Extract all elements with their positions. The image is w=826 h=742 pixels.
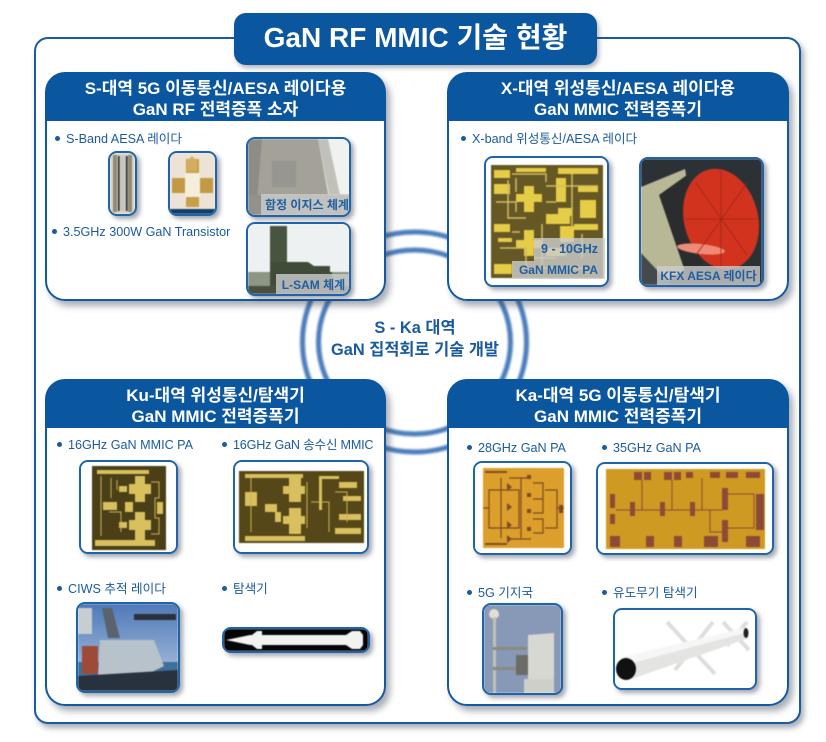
image: X-band MMIC chip: 9 - 10GHz <box>541 242 598 256</box>
heading: Ku-band: Ku-대역 위성통신/탐색기 <box>126 386 305 405</box>
heading: Ka-band: GaN MMIC 전력증폭기 <box>534 407 702 426</box>
bullet: 16GHz PA: 16GHz GaN MMIC PA <box>68 438 193 452</box>
heading: S-band <box>45 72 386 121</box>
panel: S-band <box>45 72 386 301</box>
image: 5G base station <box>482 603 563 695</box>
bullet: guided weapon seeker: 유도무기 탐색기 <box>613 586 698 600</box>
bullet: 28GHz: 28GHz GaN PA <box>478 441 566 455</box>
bullet: 3.5GHz transistor: 3.5GHz 300W GaN Transistor <box>63 225 230 239</box>
heading: Ku-band <box>45 379 386 428</box>
image: X-band MMIC chip: GaN MMIC PA <box>519 263 598 277</box>
image: Ku PA chip <box>79 460 178 554</box>
image: X-band MMIC chip <box>484 156 609 287</box>
heading: S-band: S-대역 5G 이동통신/AESA 레이다용 <box>85 79 346 98</box>
heading: S-band: GaN RF 전력증폭 소자 <box>133 100 298 119</box>
heading: X-band: GaN MMIC 전력증폭기 <box>534 100 702 119</box>
image: Aegis ship: 함정 이지스 체계 <box>265 198 349 212</box>
center caption: S - Ka 대역 <box>374 319 456 337</box>
image: transistor die <box>108 151 137 216</box>
image: packaged transistor <box>168 151 217 216</box>
image: L-SAM radar: L-SAM 체계 <box>282 278 345 292</box>
bullet: 5G base station: 5G 기지국 <box>478 586 533 600</box>
image: Aegis ship <box>246 137 351 217</box>
bullet: S-Band AESA: S-Band AESA 레이다 <box>66 132 182 146</box>
bullet: X-band AESA: X-band 위성통신/AESA 레이다 <box>472 132 637 146</box>
image: L-SAM radar <box>246 222 351 296</box>
image: missile on black <box>222 627 370 653</box>
panel: Ku-band <box>45 379 386 706</box>
heading: X-band: X-대역 위성통신/AESA 레이다용 <box>501 79 735 98</box>
image: guided missile <box>613 608 757 690</box>
center caption <box>331 319 499 358</box>
bullet: 35GHz: 35GHz GaN PA <box>613 441 701 455</box>
heading: Ka-band <box>447 379 789 428</box>
bullet: CIWS: CIWS 추적 레이다 <box>68 582 166 596</box>
bullet: seeker: 탐색기 <box>233 582 268 596</box>
heading: Ka-band: Ka-대역 5G 이동통신/탐색기 <box>516 386 720 405</box>
image: Ku transceiver chip <box>233 460 369 554</box>
image: 28GHz chip <box>473 461 572 555</box>
image: KFX AESA radar: KFX AESA 레이다 <box>660 269 757 283</box>
image: KFX AESA radar <box>639 157 764 287</box>
panel: X-band <box>447 72 789 301</box>
title <box>234 13 597 65</box>
heading: X-band <box>447 72 789 121</box>
title: GaN RF MMIC 기술 현황 <box>264 22 567 53</box>
image: CIWS ship <box>76 602 180 693</box>
center caption: GaN 집적회로 기술 개발 <box>331 340 499 358</box>
heading: Ku-band: GaN MMIC 전력증폭기 <box>132 407 299 426</box>
image: 35GHz chip <box>596 462 774 555</box>
bullet: 16GHz transceiver: 16GHz GaN 송수신 MMIC <box>233 438 373 452</box>
panel: Ka-band <box>447 379 789 706</box>
